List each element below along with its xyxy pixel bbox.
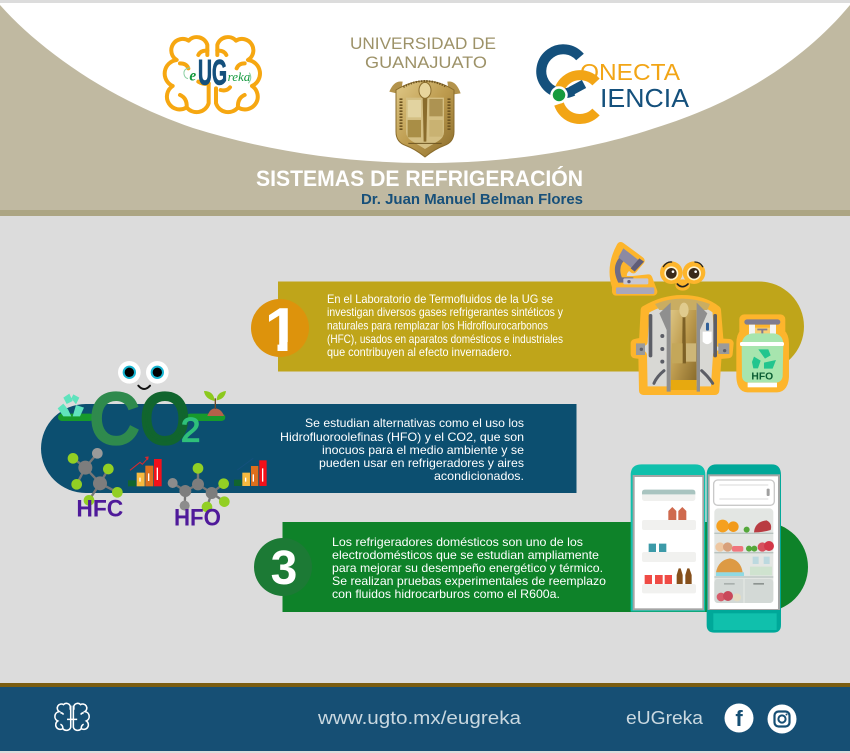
step 3 number: 3	[271, 542, 297, 595]
step 3 text: electrodomésticos que se estudian ampliamente	[332, 548, 599, 562]
step 3 text: para mejorar su desempeño energético y térmico.	[332, 561, 603, 575]
logo: Conecta Ciencia	[541, 49, 690, 119]
illustration: lab coat, microscope and HFO tank	[614, 246, 784, 392]
icon: navy C tail	[571, 84, 584, 91]
CO2 text: C	[90, 379, 139, 458]
step 1 text: que contribuyen al efecto invernadero.	[327, 345, 512, 359]
step 3 text: Se realizan pruebas experimentales de reemplazo	[332, 574, 606, 588]
logo text top: ONECTA	[580, 59, 681, 85]
footer panel	[0, 683, 850, 751]
icon: microscope	[614, 246, 654, 294]
step 1 number	[251, 299, 309, 357]
icon: green bar	[62, 406, 222, 428]
icon: HFO gas tank: HFO	[751, 372, 773, 383]
author: Dr. Juan Manuel Belman Flores	[361, 192, 583, 208]
HFC label: HFC	[76, 496, 123, 523]
step 3 number	[254, 538, 312, 596]
logo: eUGreka brain: UG	[198, 54, 227, 93]
icon: lab coat with shield	[635, 299, 729, 392]
step 1 text	[327, 292, 563, 359]
icon: university shield	[389, 81, 461, 157]
icon: rising bar chart	[128, 456, 162, 486]
illustration: open refrigerator	[631, 464, 781, 633]
step 2 text: Se estudian alternativas como el uso los	[305, 416, 524, 430]
university name	[350, 35, 496, 72]
step 1 text: En el Laboratorio de Termofluidos de la UG se	[327, 292, 553, 306]
CO2 text	[90, 379, 200, 458]
step 1 text: investigan diversos gases refrigerantes sintéticos y	[327, 305, 563, 319]
step 1 number: 1	[265, 296, 299, 365]
icon: facebook: f	[735, 706, 743, 731]
footer handle: eUGreka	[626, 708, 704, 728]
logo: eUGreka brain	[165, 37, 260, 112]
icon: falling bar chart	[234, 458, 267, 486]
CO2 text: 2	[181, 412, 200, 450]
icon: orange C	[559, 75, 596, 119]
step 3 text	[332, 535, 606, 601]
step 2 text: pueden usar en refrigeradores y aires	[319, 456, 524, 470]
panel: step 1 band	[278, 282, 804, 372]
step 3 text: con fluidos hidrocarburos como el R600a.	[332, 587, 560, 601]
university name: GUANAJUATO	[365, 54, 487, 72]
step 2 text	[280, 416, 524, 483]
logo: eUGreka brain: reka	[228, 70, 250, 84]
fridge right door	[707, 464, 781, 612]
icon: HFO gas tank	[740, 319, 784, 387]
logo text bottom: IENCIA	[600, 83, 690, 113]
panel: step 2 band	[41, 404, 576, 493]
icon: HFC molecule	[68, 448, 123, 506]
icon: eyes and smile	[660, 261, 705, 291]
CO2 text: O	[141, 379, 189, 458]
step 2 text: inocuos para el medio ambiente y se	[322, 443, 524, 457]
step 1 text: (HFC), usados en aparatos domésticos e industriales	[327, 332, 563, 346]
footer url: www.ugto.mx/eugreka	[317, 708, 522, 728]
header panel	[0, 3, 850, 216]
icon: recycle	[58, 394, 84, 416]
icon: sprout	[204, 391, 226, 416]
panel: step 3 band	[282, 522, 808, 612]
step 3 text: Los refrigeradores domésticos son uno de los	[332, 535, 583, 549]
title: SISTEMAS DE REFRIGERACIÓN	[256, 166, 583, 191]
icon: facebook	[724, 704, 754, 732]
fridge freezer base	[707, 610, 781, 633]
icon: navy C	[541, 49, 580, 93]
logo: eUGreka brain: e	[189, 68, 196, 85]
fridge left door	[631, 464, 705, 612]
university name: UNIVERSIDAD DE	[350, 35, 496, 53]
icon: CO2 eyes and smile	[118, 361, 169, 389]
icon: footer brain logo	[55, 703, 89, 730]
icon: instagram	[768, 704, 796, 734]
icon: HFO molecule	[168, 463, 230, 512]
HFO label: HFO	[174, 505, 221, 532]
step 2 text: acondicionados.	[434, 469, 524, 483]
step 2 text: Hidrofluoroolefinas (HFO) y el CO2, que son	[280, 430, 524, 444]
illustration: CO2, molecules and charts	[58, 361, 267, 532]
step 1 text: naturales para remplazar los Hidroflourocarbonos	[327, 318, 548, 332]
icon: green dot	[552, 88, 566, 102]
